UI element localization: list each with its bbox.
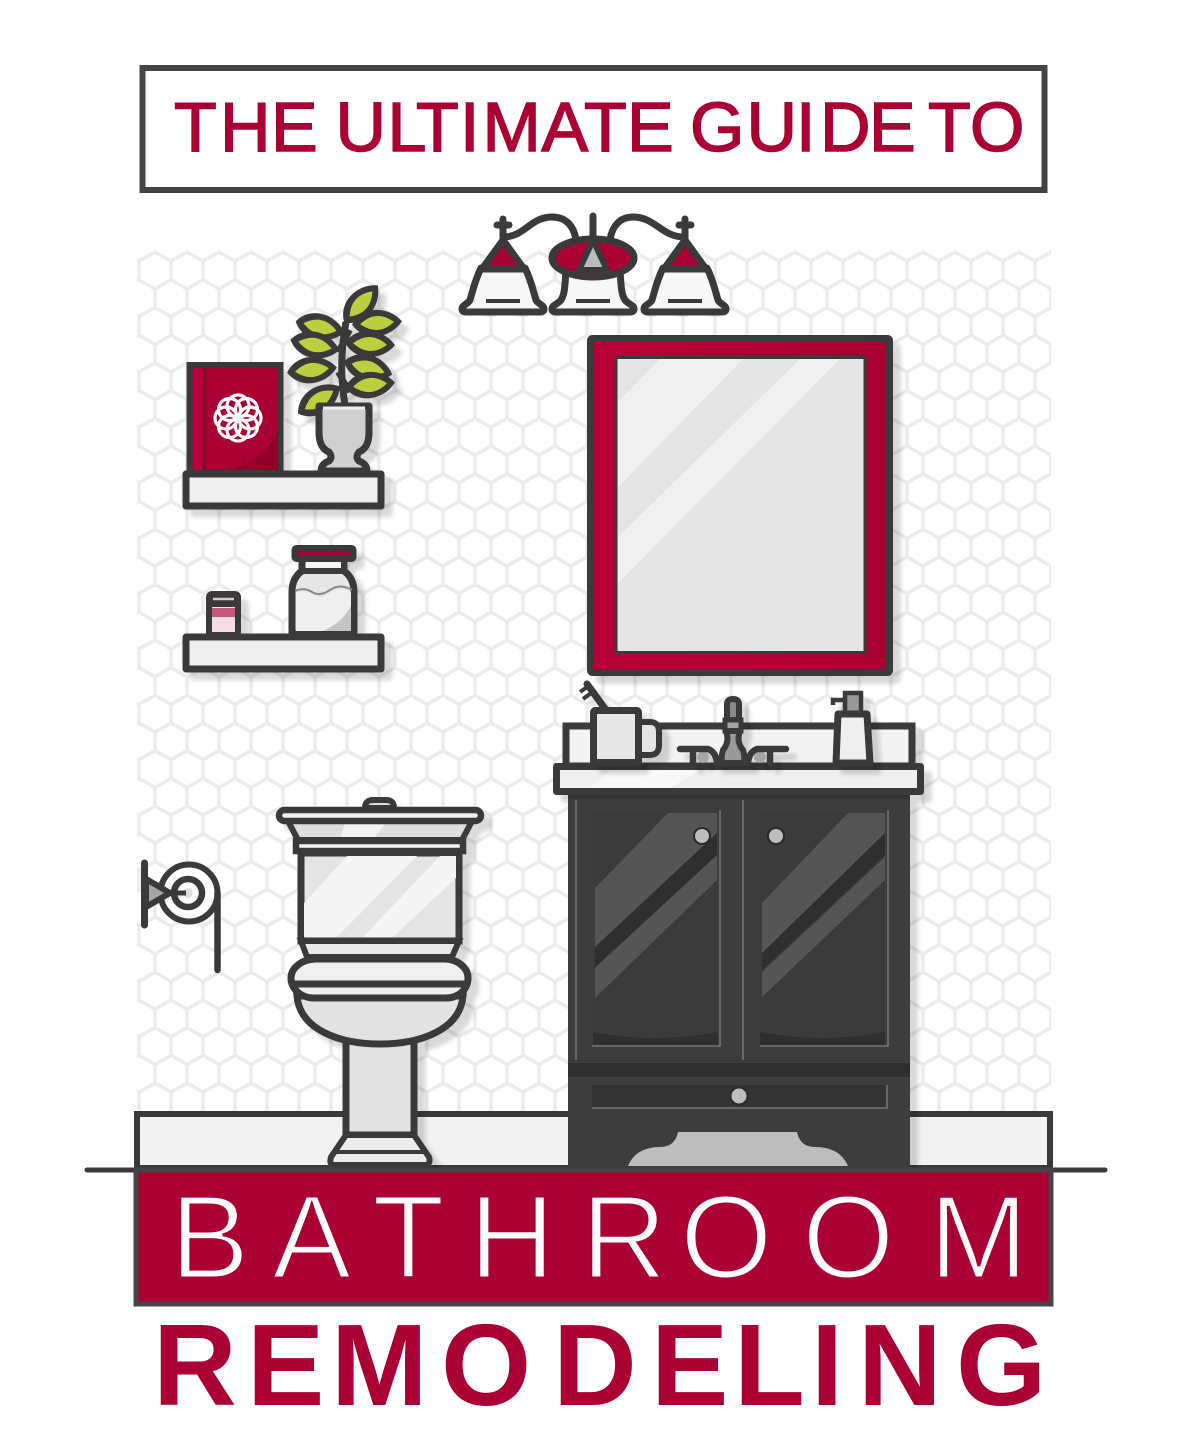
left shade (462, 219, 544, 312)
floor line left (87, 1168, 137, 1172)
vanity backsplash and counter (556, 726, 920, 1168)
icon: toothbrush and mug (580, 684, 659, 762)
upper shelf board (186, 474, 381, 506)
floor line right (1050, 1168, 1105, 1172)
tile wall background (137, 250, 1051, 1113)
right door panel (760, 813, 885, 1046)
right shade (644, 219, 726, 312)
pedestal (346, 1040, 414, 1135)
title: The Ultimate Guide To: THE ULTIMATE GUIDE TO (174, 88, 1024, 166)
tank lid (288, 821, 472, 840)
book (190, 365, 280, 472)
small jar (209, 594, 238, 635)
heading: Remodeling: REMODELING (153, 1300, 1046, 1430)
vase (319, 406, 369, 471)
icon: toilet (279, 800, 481, 1165)
book emblem (215, 395, 261, 441)
left door panel (593, 813, 718, 1046)
heading: Bathroom: BATHROOM (170, 1171, 1028, 1304)
bowl (297, 996, 463, 1044)
lower shelf board (186, 637, 381, 669)
banner: Bathroom (136, 1170, 1051, 1304)
tank (301, 853, 459, 941)
vanity cabinet (568, 790, 910, 1168)
door knobs (694, 828, 710, 844)
floor base (137, 1114, 1050, 1168)
cabinet foot opening (628, 1132, 848, 1166)
tank knob (365, 800, 394, 808)
mirror glass (616, 358, 865, 652)
icon: faucet (680, 699, 786, 763)
upper shelf with book and plant (186, 277, 403, 506)
lower shelf with jars (186, 548, 381, 669)
centre shade (552, 239, 634, 312)
icon: toilet paper holder (144, 863, 218, 970)
mirror frame (590, 338, 890, 672)
icon: vanity light fixture (462, 216, 726, 312)
mirror (590, 338, 890, 672)
large jar (292, 548, 354, 634)
potted plant (286, 277, 403, 471)
seat (291, 959, 468, 998)
title box (142, 68, 1044, 190)
countertop (556, 766, 920, 792)
drawer (592, 1085, 887, 1108)
icon: soap dispenser (833, 693, 870, 763)
light arms (503, 216, 684, 240)
door divider (576, 800, 743, 1060)
